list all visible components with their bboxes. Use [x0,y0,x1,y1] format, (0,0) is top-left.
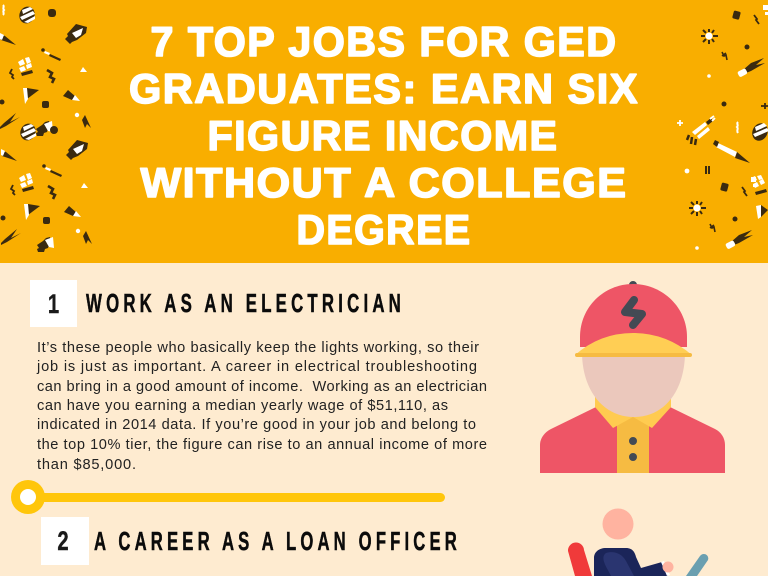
text block: electrician description: job is just as important. A career in electrical troubleshooting [36,359,477,375]
title: WITHOUT A COLLEGE [140,159,628,206]
panel: job 1 electrician [30,280,725,473]
icon: loan officer [568,508,708,576]
title: GRADUATES: EARN SIX [129,65,639,112]
text block: electrician description: than $85,000. [37,457,136,473]
text block: electrician description: can bring in a good amount of income. Working as an electrician [37,379,487,395]
number badge 2: 2 [57,526,69,557]
title: 7 TOP JOBS FOR GED [150,18,618,65]
panel: title banner [0,0,768,263]
title: DEGREE [296,206,472,253]
text block: electrician description: indicated in 2014 data. If you’re good in your job and belong to [37,417,476,433]
heading: work as an electrician: WORK AS AN ELECTRICIAN [86,288,405,318]
number badge 2 [41,517,89,565]
divider with node [11,480,445,514]
icon: left confetti pattern [0,4,92,252]
number badge 1: 1 [48,289,59,320]
panel: job 2 loan officer [41,508,708,576]
title [129,18,639,253]
text block: electrician description [36,340,487,473]
text block: electrician description: the top 10% tier, the figure can rise to an annual income of more [37,437,487,453]
title: FIGURE INCOME [208,112,558,159]
text block: electrician description: It’s these people who basically keep the lights working, so their [37,340,479,356]
heading: a career as a loan officer: A CAREER AS A LOAN OFFICER [94,526,461,556]
number badge 1 [30,280,77,327]
icon: right confetti pattern [677,5,768,250]
text block: electrician description: can have you earning a median yearly wage of $51,110, as [37,398,448,414]
icon: electrician [540,281,725,473]
